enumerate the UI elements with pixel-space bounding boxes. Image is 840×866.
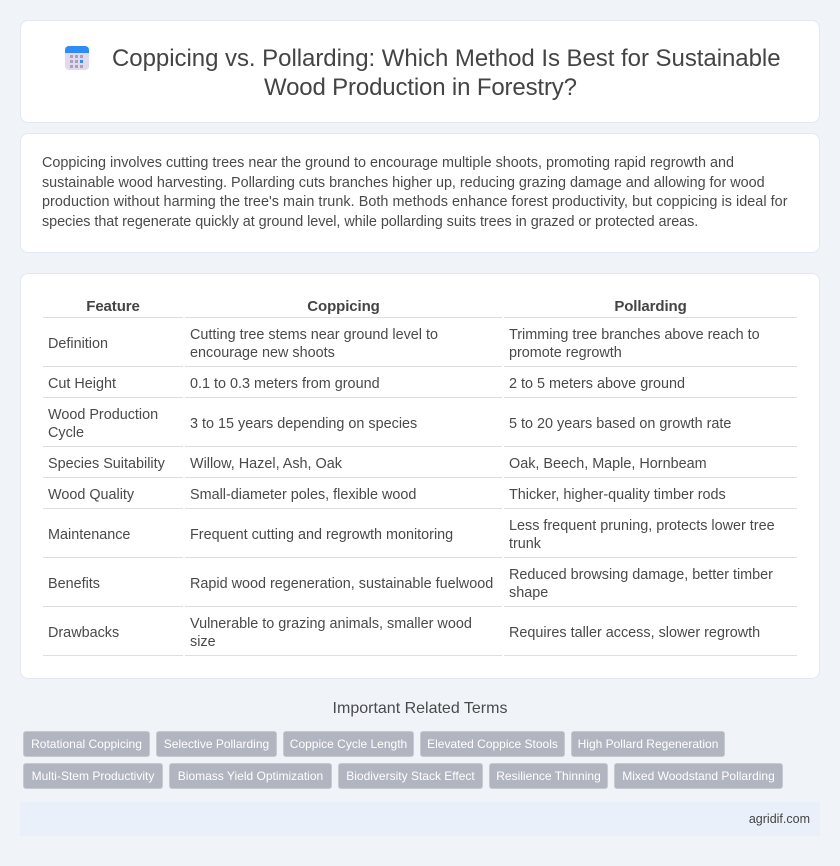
- row: Definition: [48, 327, 760, 361]
- row: Wood Quality: [48, 487, 726, 503]
- comparison table: [43, 298, 797, 656]
- row: Wood Production Cycle: 5 to 20 years based on growth rate: [509, 416, 731, 432]
- heading: related terms: Important Related Terms: [333, 700, 507, 717]
- row: Wood Production Cycle: Cycle: [48, 425, 84, 441]
- row: Benefits: Rapid wood regeneration, sustainable fuelwood: [190, 576, 493, 592]
- related terms tags: Elevated Coppice Stools: [427, 737, 558, 751]
- intro text: sustainable wood harvesting. Pollarding cuts branches higher up, reducing grazing damage and allowing for wood: [42, 174, 765, 190]
- row: Definition: Trimming tree branches above reach to: [509, 327, 760, 343]
- row: Maintenance: Maintenance: [48, 527, 130, 543]
- row: Drawbacks: Drawbacks: [48, 625, 119, 641]
- row: Cut Height: 2 to 5 meters above ground: [509, 376, 685, 392]
- title: Coppicing vs. Pollarding: Which Method Is Best for Sustainable: [112, 45, 781, 72]
- row: Definition: promote regrowth: [509, 345, 622, 361]
- row: Maintenance: Frequent cutting and regrowth monitoring: [190, 527, 453, 543]
- row: Definition: Definition: [48, 336, 108, 352]
- header: Coppicing: Coppicing: [307, 298, 380, 315]
- related terms tags: Mixed Woodstand Pollarding: [622, 769, 775, 783]
- related terms tags: Biomass Yield Optimization: [178, 769, 323, 783]
- row: Wood Production Cycle: 3 to 15 years depending on species: [190, 416, 417, 432]
- related terms tags: Biodiversity Stack Effect: [346, 769, 475, 783]
- row: Species Suitability: [48, 456, 707, 472]
- row: Drawbacks: Vulnerable to grazing animals, smaller wood: [190, 616, 472, 632]
- related terms tags: Coppice Cycle Length: [290, 737, 407, 751]
- related terms tags: High Pollard Regeneration: [578, 737, 718, 751]
- row: Wood Quality: Thicker, higher-quality timber rods: [509, 487, 726, 503]
- row: Maintenance: [48, 518, 775, 552]
- footer bar: [20, 802, 820, 836]
- row: Benefits: shape: [509, 585, 548, 601]
- row: Species Suitability: Oak, Beech, Maple, Hornbeam: [509, 456, 707, 472]
- row: Species Suitability: Willow, Hazel, Ash, Oak: [190, 456, 342, 472]
- related terms tags: Rotational Coppicing: [31, 737, 142, 751]
- row: Cut Height: 0.1 to 0.3 meters from ground: [190, 376, 380, 392]
- icon: calendar: [65, 46, 89, 70]
- row: Benefits: Benefits: [48, 576, 100, 592]
- row: Definition: Cutting tree stems near ground level to: [190, 327, 438, 343]
- intro text: production without harming the tree's main trunk. Both methods enhance forest productivity, but coppicing is ideal for: [42, 194, 788, 210]
- row: Species Suitability: Species Suitability: [48, 456, 165, 472]
- intro text: species that regenerate quickly at ground level, while pollarding suits trees in grazed or protected areas.: [42, 214, 698, 230]
- row: Maintenance: trunk: [509, 536, 541, 552]
- footer source: agridif.com: [749, 812, 810, 826]
- title: [112, 45, 781, 101]
- intro panel: [20, 133, 820, 253]
- header: Pollarding: Pollarding: [614, 298, 687, 315]
- related terms tags: Selective Pollarding: [164, 737, 269, 751]
- row: Definition: encourage new shoots: [190, 345, 335, 361]
- related terms tags: Resilience Thinning: [496, 769, 601, 783]
- row: Maintenance: Less frequent pruning, protects lower tree: [509, 518, 775, 534]
- row: Drawbacks: [48, 616, 760, 650]
- intro text: [42, 155, 788, 230]
- title: Wood Production in Forestry?: [264, 74, 577, 101]
- header card: [20, 20, 820, 123]
- row: Drawbacks: size: [190, 634, 216, 650]
- row: Cut Height: Cut Height: [48, 376, 116, 392]
- row: Wood Production Cycle: Wood Production: [48, 407, 158, 423]
- header: Feature: Feature: [86, 298, 140, 315]
- table panel: [20, 273, 820, 679]
- related terms tags: [23, 731, 783, 789]
- row: Wood Quality: Small-diameter poles, flexible wood: [190, 487, 416, 503]
- row: Wood Production Cycle: [48, 407, 731, 441]
- row: Drawbacks: Requires taller access, slower regrowth: [509, 625, 760, 641]
- row: Benefits: [48, 567, 773, 601]
- intro text: Coppicing involves cutting trees near the ground to encourage multiple shoots, promoting rapid regrowth and: [42, 155, 734, 171]
- row: Cut Height: [48, 376, 685, 392]
- row: Benefits: Reduced browsing damage, better timber: [509, 567, 773, 583]
- row: Wood Quality: Wood Quality: [48, 487, 134, 503]
- related terms tags: Multi-Stem Productivity: [32, 769, 154, 783]
